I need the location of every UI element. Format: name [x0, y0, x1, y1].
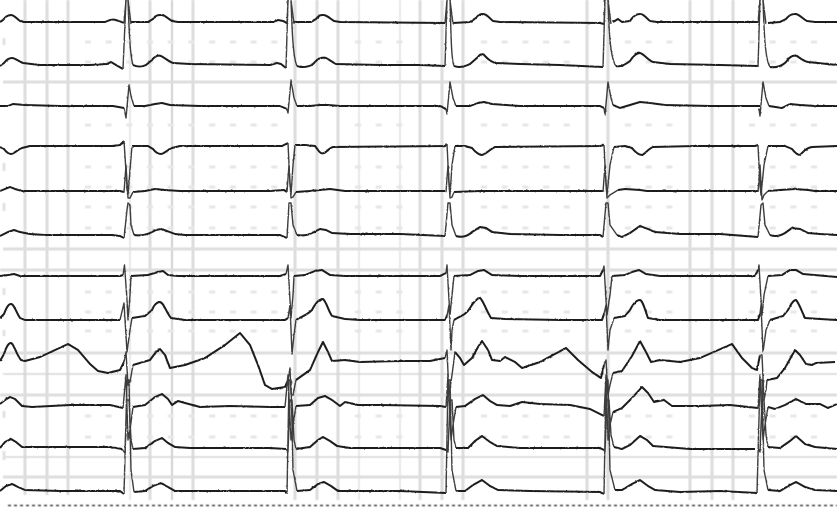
lead 7 trace [0, 265, 837, 320]
lead 12 trace [0, 380, 837, 494]
dash marks [85, 42, 820, 437]
bottom dashed time axis [8, 504, 837, 506]
lead 10 trace [0, 375, 837, 440]
lead 4 trace [0, 141, 837, 195]
lead 2 trace [0, 0, 837, 69]
lead 6 trace [0, 203, 837, 238]
lead 11 trace [0, 400, 837, 453]
lead 5 trace [0, 165, 837, 200]
lead 8 trace [0, 298, 837, 354]
lead 1 trace [0, 0, 837, 24]
lead 9 trace [0, 333, 835, 400]
lead 3 trace [0, 80, 837, 118]
